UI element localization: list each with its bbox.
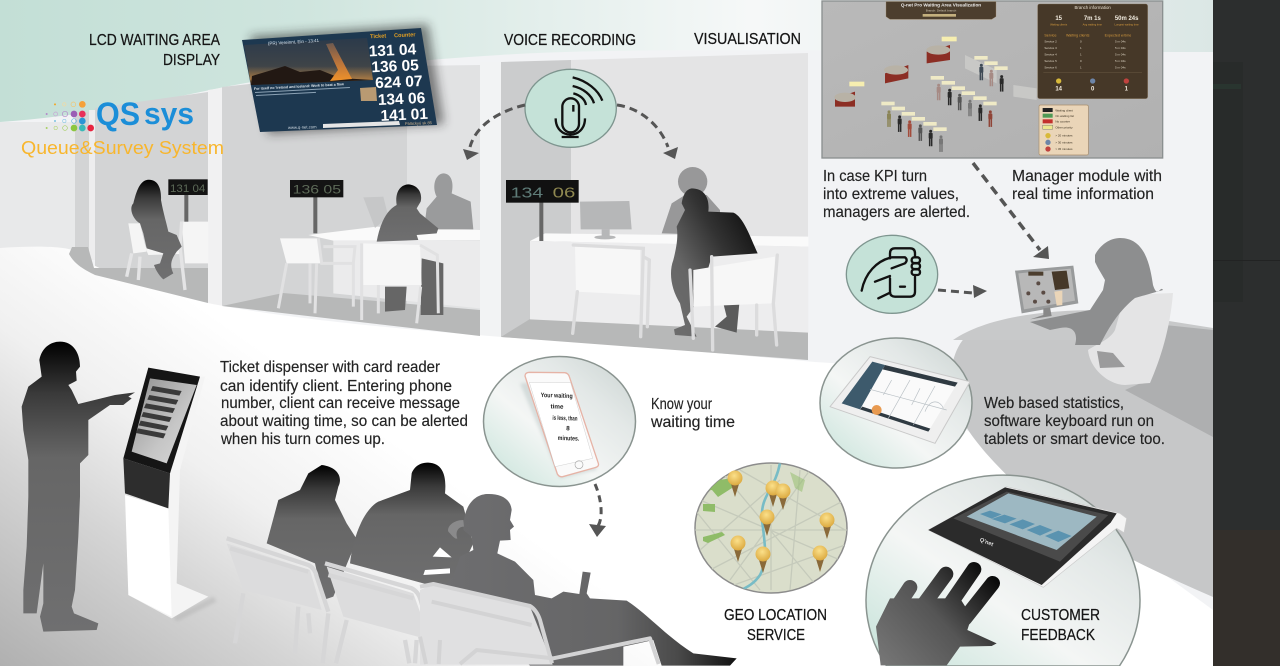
feedback device screen [967, 493, 1097, 550]
heading: LCD waiting area display [89, 32, 220, 69]
counter display 134 06 [506, 180, 579, 241]
queue tags [881, 56, 1008, 131]
ticket and counter column: 134 06 [378, 90, 426, 109]
branch information panel: 7m 1s [1084, 16, 1101, 22]
teller room 2 with clients [278, 173, 480, 323]
branch information panel: Service [1044, 34, 1057, 38]
client silhouette [671, 188, 758, 337]
logo dots [46, 101, 94, 131]
counter display 136 05: 136 05 [293, 182, 341, 196]
phone message: minutes. [558, 435, 580, 443]
news caption: For itself no 'Ireland and Iceland: Work to beat a flow [254, 82, 344, 91]
kiosk screen frame [123, 368, 200, 473]
text: know your waiting time [650, 396, 735, 431]
empty kiosks [965, 55, 1037, 100]
legend panel: Other priority [1055, 125, 1073, 129]
white gaps [423, 547, 452, 575]
woman silhouette [131, 180, 182, 279]
branch information panel: 15 [1055, 16, 1063, 22]
text: know your waiting time: waiting time [650, 414, 735, 431]
QSsys logo [21, 96, 224, 158]
phone screen [529, 382, 593, 467]
legend panel: On waiting list [1055, 114, 1074, 118]
branch information panel: 0 [1080, 59, 1082, 63]
text: ticket dispenser description: number, client can receive message [221, 395, 460, 412]
seated person 2 [350, 463, 473, 593]
tablet sidebar [842, 362, 885, 409]
text: manager module: real time information [1012, 186, 1154, 203]
teller room 1 with woman [127, 179, 208, 290]
kiosk screen [132, 378, 197, 463]
text: web based statistics: tablets or smart device too. [984, 431, 1165, 448]
branch information panel: 0 [1091, 87, 1095, 93]
tablet gauge [872, 405, 882, 415]
phone shadow [520, 380, 597, 478]
panel: manager desk area [950, 310, 1213, 597]
heading: LCD waiting area display: DISPLAY [163, 52, 220, 69]
map pins [728, 470, 834, 573]
officer silhouette [424, 173, 473, 229]
circle: tablet web statistics [820, 338, 972, 468]
branch information panel: 5 m 04s [1115, 66, 1126, 70]
news caption [254, 82, 350, 96]
branch information panel: Service 2 [1044, 39, 1057, 43]
phone message: 8 [566, 425, 570, 432]
legend panel: Waiting client [1055, 108, 1073, 112]
legend panel: > 45 minutes [1055, 147, 1073, 151]
phone message: is less, than [552, 415, 578, 423]
circle: phone waiting time [484, 356, 636, 486]
feedback buttons [980, 511, 1072, 542]
laptop [363, 197, 388, 228]
ticket and counter column: Ticket [370, 34, 386, 40]
ponytail [448, 520, 464, 539]
feedback device face [928, 487, 1117, 585]
legend panel: > 30 minutes [1055, 140, 1073, 144]
phone message: time [550, 403, 564, 411]
manager chair [1088, 293, 1173, 385]
footer strip: www.q-net.com [288, 124, 317, 130]
text: web based statistics: Web based statistics, [984, 395, 1124, 412]
kiosk shadow [173, 597, 217, 622]
title panel: Branch: Default branch [926, 8, 957, 12]
branch information panel: Avg waiting time [1083, 22, 1102, 26]
feedback device stand [928, 487, 1127, 587]
teller room 3 with clients [506, 167, 808, 350]
white desk and chair [127, 222, 208, 290]
manager figure [1030, 238, 1163, 345]
desk [308, 227, 480, 308]
logo tagline: Queue&Survey System [21, 137, 224, 158]
text: ticket dispenser description [220, 359, 468, 448]
text: manager module: Manager module with [1012, 168, 1162, 185]
tablet top and bottom bars [860, 365, 958, 432]
counter display 134 06: 06 [553, 185, 575, 201]
branch information panel: Service 4 [1044, 53, 1057, 57]
arrow: voice to room 3 [617, 105, 678, 159]
text: KPI alerts: managers are alerted. [823, 204, 970, 221]
phone message [539, 392, 581, 443]
branch information panel [1038, 4, 1148, 99]
heading: customer feedback: FEEDBACK [1021, 627, 1095, 644]
circle: geo location map [695, 463, 848, 600]
ticket and counter column: Counter [394, 32, 416, 39]
heading: visualisation: VISUALISATION [694, 31, 801, 48]
chairs [278, 238, 438, 323]
heading: geo location service [724, 607, 827, 644]
title panel [886, 2, 996, 19]
logo wordmark: QS [96, 96, 140, 132]
text: KPI alerts [823, 168, 970, 221]
text: ticket dispenser description: Ticket dispenser with card reader [220, 359, 441, 376]
phone home button [575, 461, 583, 469]
branch information panel: Service 3 [1044, 46, 1057, 50]
branch information panel: 5 m 04s [1115, 46, 1126, 50]
kiosk ticket dispenser [123, 368, 217, 622]
news thumbnail [360, 87, 377, 101]
ticket and counter column: 136 05 [371, 57, 420, 76]
branch information panel: 0 [1080, 39, 1082, 43]
branch information panel: 5 m 04s [1115, 53, 1126, 57]
display body [242, 28, 437, 132]
branch information panel: 1 [1125, 87, 1129, 93]
branch information panel: 5 m 04s [1115, 39, 1126, 43]
officer silhouette [662, 167, 720, 235]
branch information panel: Waiting clients [1066, 34, 1090, 38]
counters [834, 37, 957, 107]
kiosk lower black body [123, 458, 170, 508]
branch information panel: Waiting clients [1050, 22, 1068, 26]
text: web based statistics [984, 395, 1165, 448]
arrow: voice to room 2 [463, 105, 525, 160]
standing client silhouette [22, 342, 135, 632]
map parks [703, 472, 805, 543]
monitor [580, 201, 632, 239]
room floor shadows [69, 247, 808, 360]
manager monitor [1015, 266, 1078, 319]
branch information panel: Longest waiting time [1115, 22, 1139, 26]
LCD waiting area display [242, 24, 444, 134]
legend panel: > 20 minutes [1055, 134, 1073, 138]
chair seat inset [1097, 351, 1125, 368]
tablet frame [830, 357, 970, 443]
title panel: Q-net Pro Waiting Area Visualization [901, 3, 981, 8]
queue figures [887, 64, 1004, 152]
tablet panel grid [870, 380, 947, 425]
display shadow [250, 24, 444, 134]
video frame [244, 38, 373, 85]
footer strip [288, 120, 433, 130]
QSsys logo: sys [144, 96, 194, 131]
arrow: module to manager [973, 163, 1049, 259]
text: KPI alerts: into extreme values, [823, 186, 959, 203]
kiosk side and base [128, 377, 208, 618]
text: ticket dispenser description: when his turn comes up. [220, 431, 385, 448]
legend panel [1039, 105, 1088, 155]
manager module screen [822, 1, 1163, 158]
heading: customer feedback: CUSTOMER [1021, 607, 1100, 624]
branch information panel: Service 5 [1044, 59, 1057, 63]
icon: hand holding phone [846, 235, 938, 313]
client silhouette [377, 184, 443, 315]
heading: geo location service: GEO LOCATION [724, 607, 827, 624]
branch information panel: 1 [1080, 46, 1082, 50]
kiosk column [125, 495, 172, 617]
text: manager module [1012, 168, 1162, 203]
branch information panel: 1 [1080, 66, 1082, 70]
phone body [525, 372, 599, 477]
desk [530, 233, 808, 333]
panel: waiting room back walls [0, 53, 808, 360]
branch information panel: 1 [1080, 53, 1082, 57]
seated person 3 [440, 494, 737, 666]
seated clients with chairs [227, 463, 737, 666]
footer strip: Palackyú sk 85 [405, 120, 433, 126]
legend panel: No counter [1055, 120, 1070, 124]
headline bar: (PR) Vereinnt, Ein - 13:41 [268, 38, 320, 46]
text: KPI alerts: In case KPI turn [823, 168, 927, 185]
heading: voice recording: VOICE RECORDING [504, 32, 636, 49]
branch information panel: 50m 24s [1115, 16, 1139, 22]
manager silhouette at monitor [1015, 238, 1173, 385]
standing client and kiosk [22, 342, 217, 632]
chairs [573, 245, 777, 350]
chair 2 [325, 563, 435, 663]
text: ticket dispenser description: can identify client. Entering phone [220, 378, 452, 395]
panel: floor with white foreground [0, 247, 1213, 666]
feedback device logo: Q'net [979, 537, 994, 548]
ticket and counter column: 141 01 [380, 106, 429, 125]
heading: LCD waiting area display: LCD WAITING AREA [89, 32, 220, 49]
arrow: phone to manager [938, 285, 987, 298]
chair 3 [420, 584, 659, 665]
text: know your waiting time: Know your [651, 396, 713, 413]
ticket and counter column: 131 04 [368, 41, 417, 60]
counter display 136 05 [290, 180, 343, 233]
circle: customer feedback [866, 475, 1140, 666]
hand silhouette [876, 569, 997, 665]
branch information panel: 14 [1055, 87, 1063, 93]
branch information panel: Service 6 [1044, 66, 1057, 70]
counter display 134 06: 134 [511, 185, 543, 201]
icon: voice recording microphone [525, 69, 616, 147]
ticket and counter column [368, 32, 429, 125]
right dark strip [1213, 0, 1280, 666]
map river [742, 463, 782, 589]
kiosk buttons [136, 386, 182, 438]
counter display 131 04: 131 04 [170, 183, 205, 195]
branch information panel: Expected w.time [1105, 34, 1131, 38]
branch information panel: 5 m 04s [1115, 59, 1126, 63]
arrow: phone to clients [589, 484, 606, 537]
phone message: Your waiting [541, 392, 573, 400]
heading: geo location service: SERVICE [747, 627, 805, 644]
map roads [695, 465, 848, 590]
text: web based statistics: software keyboard run on [984, 413, 1154, 430]
text: ticket dispenser description: about waiting time, so can be alerted [220, 413, 468, 430]
seated person 1 [267, 465, 357, 600]
heading: customer feedback [1021, 607, 1100, 644]
feedback device bezel [953, 492, 1108, 562]
teal header band [0, 0, 1213, 122]
ticket and counter column: 624 07 [375, 73, 423, 92]
branch information panel: Branch information [1074, 5, 1111, 10]
chair 1 [227, 538, 328, 663]
tablet screen [842, 362, 958, 432]
